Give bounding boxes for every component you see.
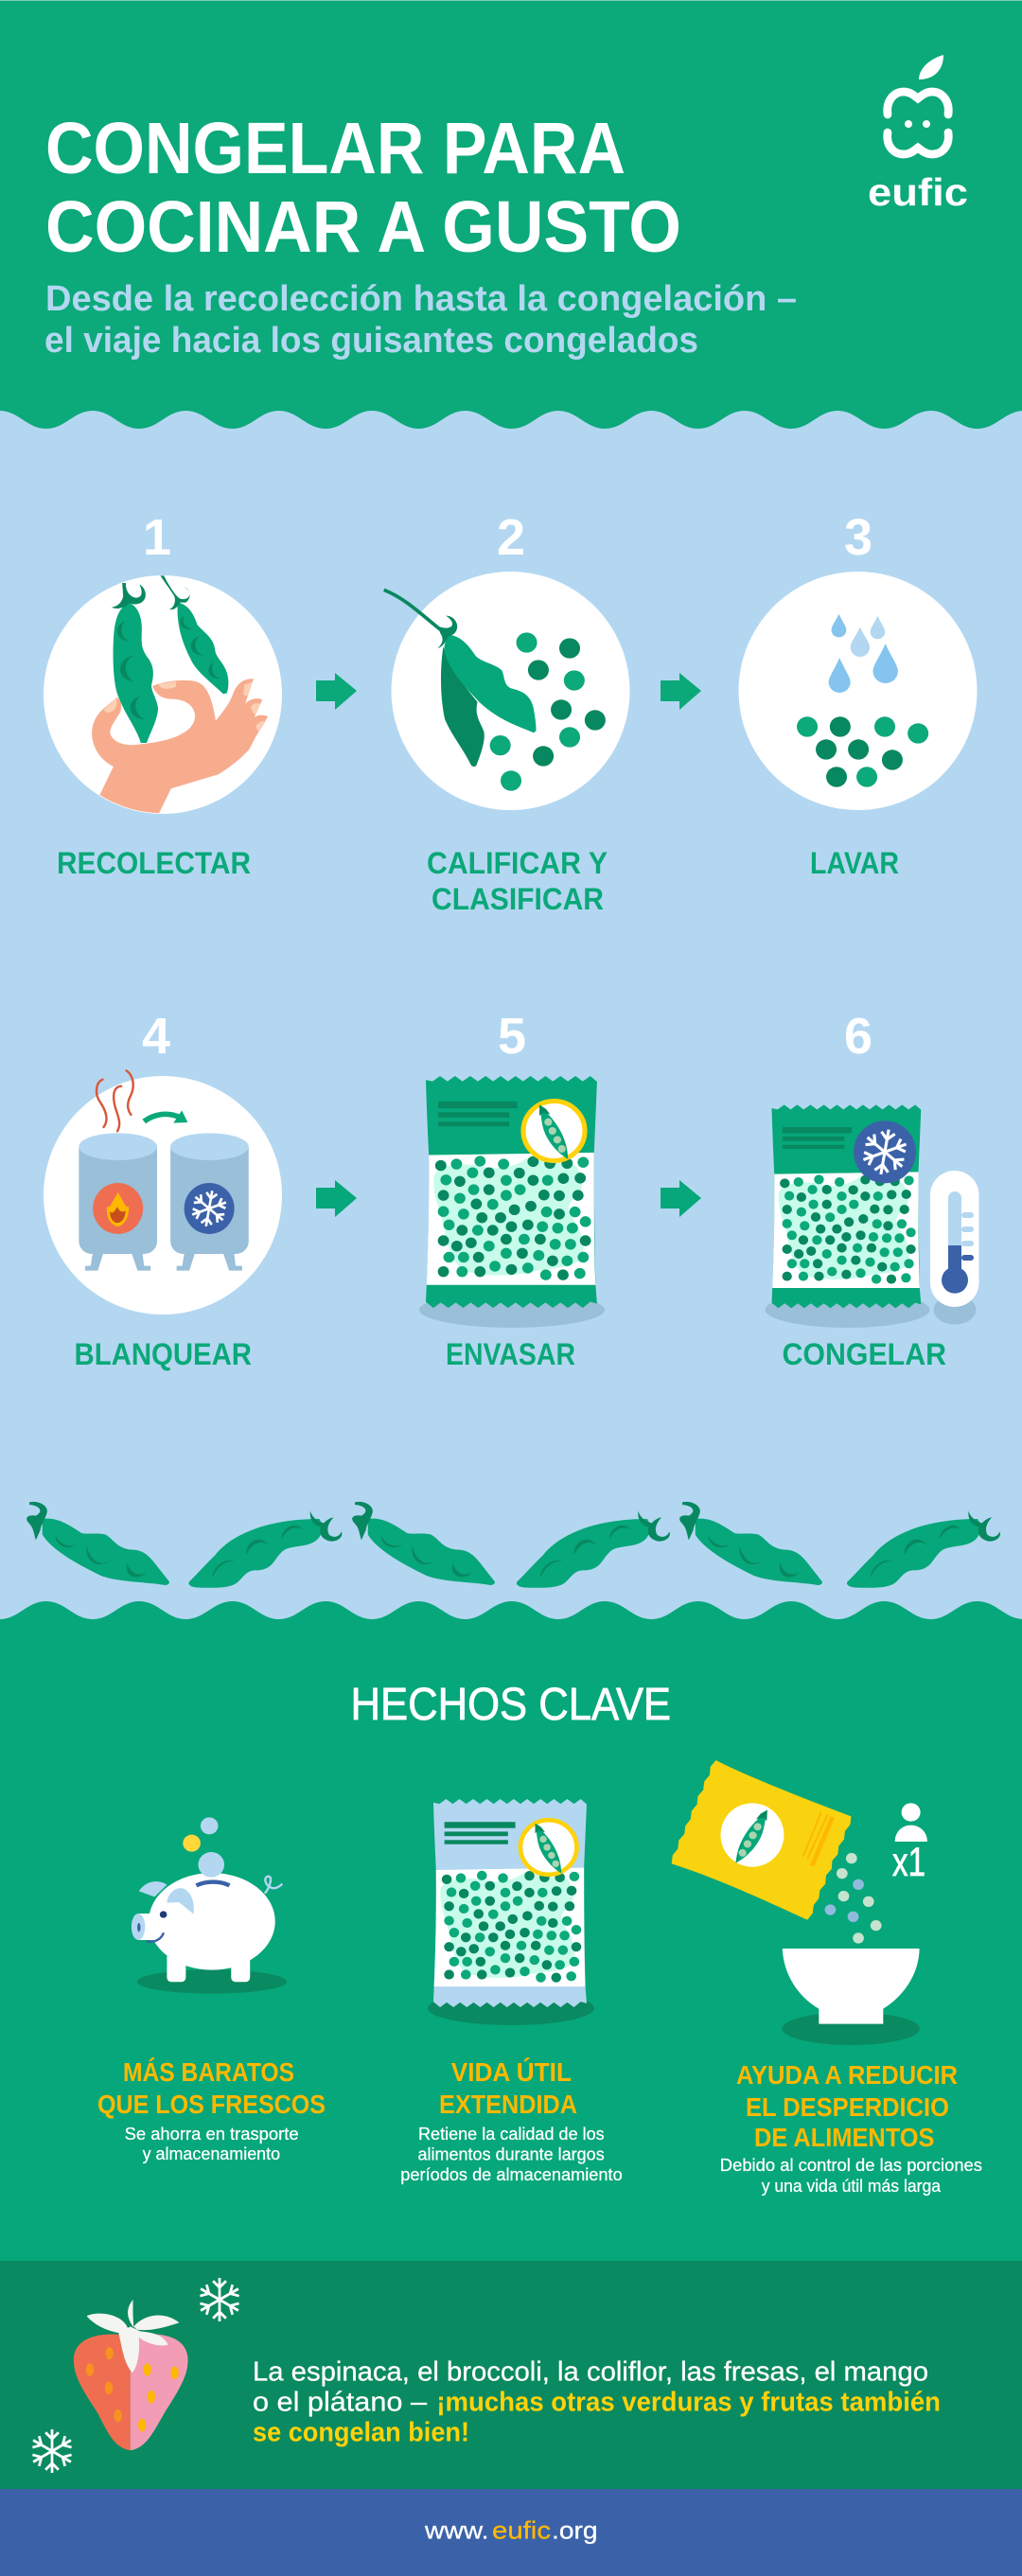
icon: snowflake top xyxy=(198,2278,241,2321)
arrow: step 1 to 2 xyxy=(316,673,357,710)
footer url: .org xyxy=(552,2516,598,2545)
footer url: eufic xyxy=(492,2516,551,2545)
subtitle: el viaje hacia los guisantes congelados xyxy=(44,321,698,361)
text: other foods: se congelan bien! xyxy=(253,2417,469,2447)
fact 3: reduces food waste: EL DESPERDICIO xyxy=(746,2092,949,2122)
illustration: water drops over peas xyxy=(797,614,928,787)
step 4: blanquear: 4 xyxy=(142,1008,170,1065)
text: other foods: La espinaca, el broccoli, la coliflor, las fresas, el mango xyxy=(253,2357,928,2388)
title xyxy=(45,108,681,268)
fact 3: reduces food waste: DE ALIMENTOS xyxy=(754,2123,935,2152)
icon: thermometer xyxy=(930,1171,978,1325)
icon: strawberry xyxy=(74,2300,188,2450)
text: other foods: o el plátano – xyxy=(253,2388,428,2418)
row of pea pods divider xyxy=(26,1502,1000,1588)
step 1: recolectar xyxy=(44,509,282,880)
step 6: congelar: CONGELAR xyxy=(782,1336,946,1371)
heading: hechos clave: HECHOS CLAVE xyxy=(350,1680,671,1730)
fact 2: extended shelf life: VIDA ÚTIL xyxy=(451,2057,572,2087)
panel: other frozen foods band xyxy=(0,2261,1022,2489)
step 6: congelar: 6 xyxy=(844,1008,872,1065)
footer url: www. xyxy=(424,2516,488,2545)
logo: eufic apple: eufic xyxy=(868,170,968,214)
title: COCINAR A GUSTO xyxy=(45,186,681,268)
step 2: calificar y clasificar: CLASIFICAR xyxy=(432,881,604,916)
illustration: frozen bag of peas xyxy=(772,1104,921,1308)
footer url xyxy=(424,2516,598,2545)
step 4: blanquear xyxy=(44,1008,282,1371)
panel: key facts section with wavy top edge xyxy=(0,1601,1022,2261)
step 3: lavar: LAVAR xyxy=(810,845,899,880)
fact 2: extended shelf life: períodos de almacenamiento xyxy=(400,2164,623,2184)
step 3: lavar xyxy=(738,509,977,880)
title: CONGELAR PARA xyxy=(45,108,626,189)
fact 3: reduces food waste xyxy=(672,1760,982,2196)
illustration: pea pod and sorted peas xyxy=(384,590,606,791)
fact 1: cheaper than fresh xyxy=(97,1817,326,2163)
step 4: blanquear: BLANQUEAR xyxy=(74,1336,252,1371)
step 5: envasar: ENVASAR xyxy=(446,1336,575,1371)
step 6: congelar xyxy=(765,1008,978,1371)
illustration: yellow sachet pouring peas into a bowl xyxy=(672,1760,927,2045)
step 5: envasar xyxy=(419,1008,605,1371)
step 1: recolectar: RECOLECTAR xyxy=(57,845,251,880)
step 2: calificar y clasificar: CALIFICAR Y xyxy=(427,845,608,880)
panel: header background xyxy=(0,0,1022,435)
step 3: lavar: 3 xyxy=(844,509,872,566)
step 1: recolectar: 1 xyxy=(143,509,171,566)
step 5: envasar: 5 xyxy=(498,1008,526,1065)
fact 2: extended shelf life: alimentos durante largos xyxy=(418,2144,605,2163)
illustration: green bag of peas xyxy=(426,1076,597,1308)
fact 2: extended shelf life: Retiene la calidad de los xyxy=(418,2124,605,2144)
subtitle xyxy=(44,279,797,361)
icon: pea badge xyxy=(520,1820,576,1875)
step 2: calificar y clasificar xyxy=(384,509,630,916)
icon: blue snowflake badge xyxy=(854,1120,916,1183)
logo: eufic apple xyxy=(868,55,968,214)
subtitle: Desde la recolección hasta la congelación – xyxy=(45,279,797,319)
icon: snowflake bottom xyxy=(30,2429,74,2473)
fact 1: cheaper than fresh: MÁS BARATOS xyxy=(123,2057,294,2087)
fact 2: extended shelf life xyxy=(400,1799,623,2184)
fact 3: reduces food waste: y una vida útil más larga xyxy=(762,2176,942,2196)
icon: piggy bank xyxy=(132,1817,287,1994)
fact 3: reduces food waste: AYUDA A REDUCIR xyxy=(736,2060,958,2090)
panel: process section with wavy top edge xyxy=(0,411,1022,1628)
step 2: calificar y clasificar: 2 xyxy=(497,509,525,566)
arrow: step 4 to 5 xyxy=(316,1180,357,1217)
fact 3: reduces food waste: Debido al control de las porciones xyxy=(720,2155,982,2175)
fact 2: extended shelf life: EXTENDIDA xyxy=(439,2090,577,2119)
footer xyxy=(0,2489,1022,2576)
fact 1: cheaper than fresh: Se ahorra en trasporte xyxy=(125,2124,299,2144)
fact 1: cheaper than fresh: y almacenamiento xyxy=(143,2144,280,2163)
icon: pea badge xyxy=(523,1102,585,1160)
fact 1: cheaper than fresh: QUE LOS FRESCOS xyxy=(97,2090,326,2119)
illustration: hand picking pea pods xyxy=(92,575,268,813)
text: other foods xyxy=(253,2357,941,2447)
arrow: step 2 to 3 xyxy=(661,673,701,710)
fact 3: reduces food waste: x1 xyxy=(892,1840,925,1885)
illustration: blue bag of peas xyxy=(433,1799,587,2007)
text: other foods: ¡muchas otras verduras y frutas también xyxy=(436,2388,941,2418)
illustration: hot and cold tanks xyxy=(79,1070,249,1271)
arrow: step 5 to 6 xyxy=(661,1180,701,1217)
